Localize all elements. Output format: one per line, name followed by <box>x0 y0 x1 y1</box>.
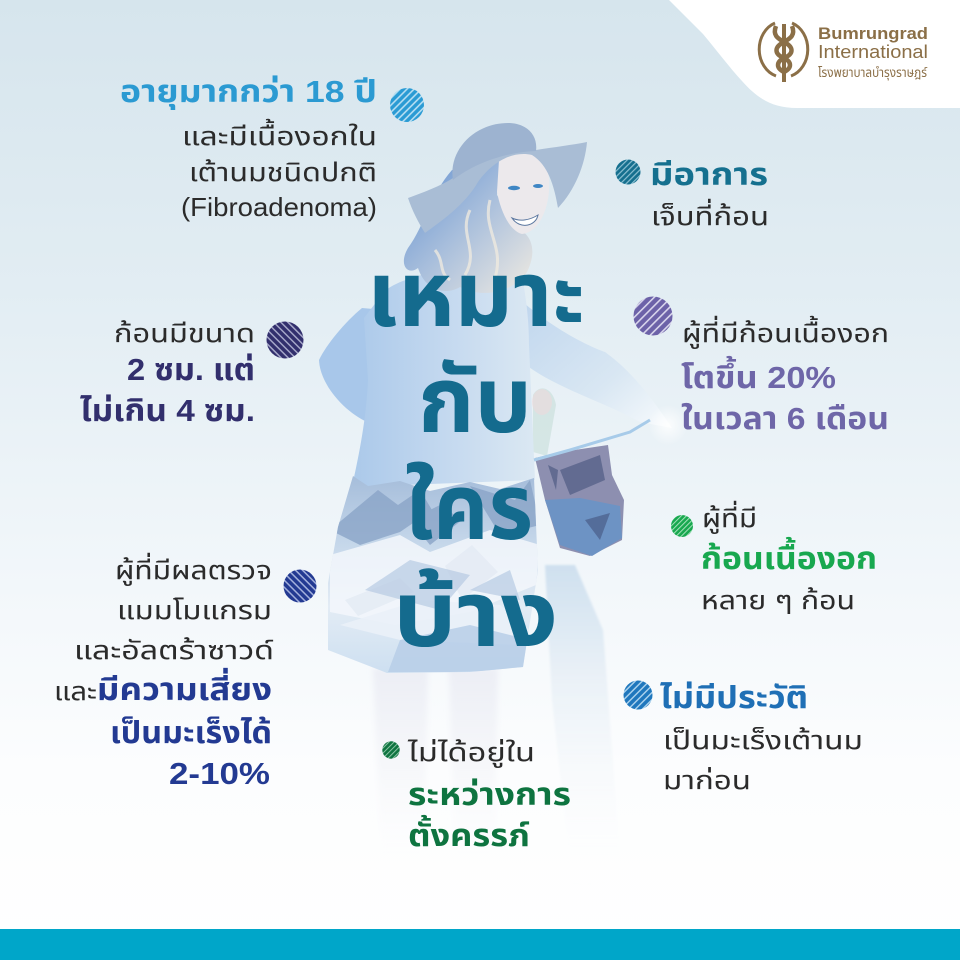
text <box>120 74 377 222</box>
dress base <box>328 476 538 673</box>
bicycle rear fading <box>545 565 622 885</box>
item: lump grows 20% <box>634 296 889 436</box>
dot <box>390 88 424 122</box>
text <box>80 318 255 428</box>
text: ผู้ที่มีผลตรวจ <box>115 552 272 586</box>
text: อายุมากกว่า 18 ปี <box>120 74 377 110</box>
item: multiple lumps: หลาย ๆ ก้อน <box>701 585 855 615</box>
logo wordmark <box>818 24 928 80</box>
face <box>497 153 549 234</box>
item: multiple lumps: ก้อนเนื้องอก <box>701 536 877 576</box>
tulip blush <box>532 389 552 415</box>
item: lump grows 20%: โตขึ้น 20% <box>681 355 836 395</box>
text: มีอาการ <box>650 157 768 192</box>
item: symptom pain: เจ็บที่ก้อน <box>651 198 769 231</box>
left arm <box>319 308 385 422</box>
dot <box>634 296 672 336</box>
item: size 2 to 4 cm <box>80 318 304 428</box>
handlebar <box>534 420 650 460</box>
hat brim <box>408 142 587 233</box>
dot <box>284 570 316 602</box>
text: และอัลตร้าซาวด์ <box>74 635 274 665</box>
flowers <box>533 388 556 456</box>
item: symptom pain <box>616 157 769 231</box>
logo wordmark: International <box>818 42 928 62</box>
mountain dress <box>328 476 538 673</box>
bottom bar <box>0 929 960 960</box>
main title: ใคร <box>405 457 533 559</box>
right arm <box>505 285 672 428</box>
sweater <box>352 265 535 487</box>
item: not pregnant: ตั้งครรภ์ <box>408 814 530 853</box>
dot <box>616 160 640 184</box>
text: ไม่มีประวัติ <box>660 680 808 715</box>
logo: Bumrungrad International <box>759 23 928 82</box>
text: ไม่เกิน 4 ซม. <box>80 393 255 428</box>
item: multiple lumps <box>671 500 877 615</box>
item: not pregnant: ระหว่างการ <box>408 777 571 812</box>
text <box>54 552 274 791</box>
basket lower blue box <box>545 498 622 556</box>
snow fields <box>330 530 540 625</box>
eyes <box>508 184 543 190</box>
logo emblem <box>759 23 808 82</box>
basket <box>535 445 624 556</box>
main title: บ้าง <box>393 564 558 666</box>
text: เต้านมชนิดปกติ <box>189 157 377 187</box>
text: 2-10% <box>169 756 270 791</box>
hat crown <box>452 123 536 180</box>
hair <box>404 158 532 293</box>
item: no cancer history: มาก่อน <box>663 765 751 795</box>
dot <box>671 515 693 537</box>
main title: เหมาะ <box>367 244 585 346</box>
mid detail <box>365 560 520 610</box>
hair curls <box>435 200 498 280</box>
main title <box>367 244 585 666</box>
item: not pregnant <box>382 737 571 853</box>
text: ไม่ได้อยู่ใน <box>407 737 535 768</box>
item: no cancer history: เป็นมะเร็งเต้านม <box>663 725 863 755</box>
dot <box>266 322 304 358</box>
hem shadow <box>388 625 530 672</box>
legs fading out <box>373 668 498 885</box>
dark ridges <box>330 480 540 616</box>
text: และมีความเสี่ยง <box>54 667 272 707</box>
dot <box>382 741 400 759</box>
main title: กับ <box>418 350 532 452</box>
white logo corner panel <box>669 0 960 108</box>
text: ผู้ที่มีก้อนเนื้องอก <box>682 315 889 349</box>
item: age over 18 <box>120 74 424 222</box>
text: แมมโมแกรม <box>117 595 272 625</box>
snow lower <box>341 610 528 640</box>
basket dark speckle <box>548 455 610 540</box>
text: เป็นมะเร็งได้ <box>110 715 272 750</box>
smile <box>512 215 538 225</box>
item: no cancer history <box>624 680 863 795</box>
text: ผู้ที่มี <box>702 500 757 534</box>
text: 2 ซม. แต่ <box>127 352 255 387</box>
woman figure illustration <box>268 123 679 729</box>
text: และมีเนื้องอกใน <box>182 118 377 151</box>
hand glow <box>648 405 688 445</box>
text: ก้อนมีขนาด <box>114 318 255 348</box>
text: (Fibroadenoma) <box>181 192 377 222</box>
logo wordmark: Bumrungrad <box>818 24 928 43</box>
item: mammogram risk <box>54 552 316 791</box>
logo wordmark: โรงพยาบาลบำรุงราษฎร์ <box>818 65 928 80</box>
dot <box>624 680 652 710</box>
item: lump grows 20%: ในเวลา 6 เดือน <box>681 401 889 436</box>
